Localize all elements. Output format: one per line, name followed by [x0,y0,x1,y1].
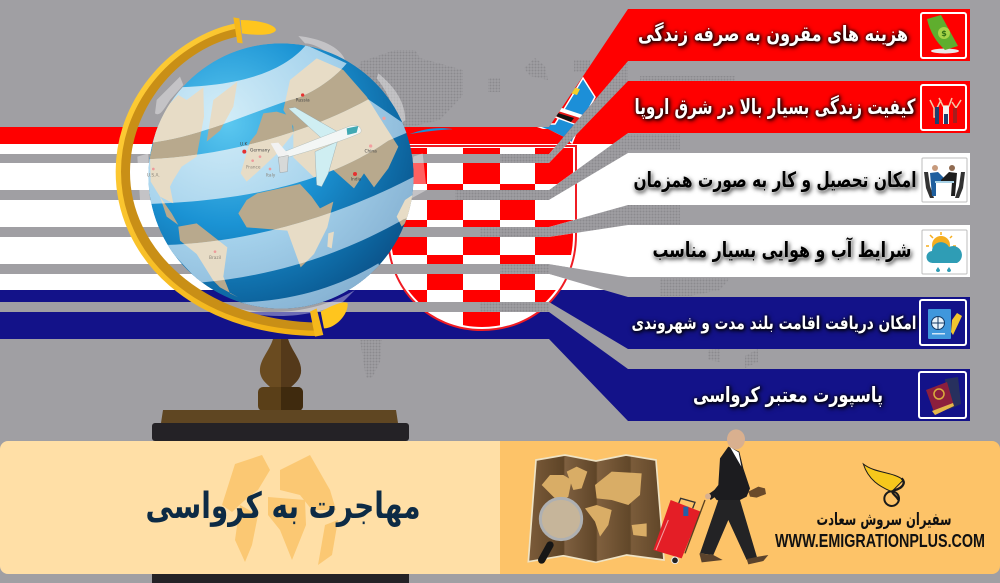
city labels: Germany [250,148,270,154]
red suitcase [653,498,705,564]
airplane [271,107,361,187]
right ribbon labels [632,13,967,418]
checkerboard [391,148,573,330]
dark continents [150,58,415,297]
stand collar shade [281,387,303,411]
stand base below panel [152,574,409,583]
city labels: Italy [266,173,276,179]
label 6 text: پاسپورت معتبر کرواسی [693,383,883,407]
label 4 text: شرایط آب و هوایی بسیار مناسب [652,237,912,262]
label 5 text: امکان دریافت اقامت بلند مدت و شهروندی [632,313,916,334]
city labels [147,93,386,261]
light continents [150,58,415,297]
city labels: Brazil [209,255,221,261]
icon box 6: passports [919,372,966,418]
banner right [500,441,1000,574]
stand neck [260,339,301,387]
title: مهاجرت به کرواسی [146,486,420,527]
icon box 1: money: $ [941,29,947,38]
city labels: France [246,164,261,170]
dark sphere layer [148,43,415,309]
city labels: China [364,148,377,154]
stand collar [258,387,303,411]
folded map [528,455,664,562]
globe stand [152,339,409,441]
city labels: U.K. [240,142,249,148]
logo mark [863,464,904,506]
icon box 5: passport and ticket [920,300,966,345]
coat of arms shield [388,146,576,330]
city labels: India [351,177,362,183]
walking man [699,429,768,564]
globe [118,17,427,337]
light sphere bands [148,43,415,309]
city labels: Russia [296,98,310,104]
banner left [0,441,500,574]
magnifier [540,498,582,560]
icon box 1: money [921,13,966,58]
halo arcs [137,36,427,316]
bottom banner [0,429,1000,574]
stand plinth top [161,410,398,423]
icon box 3: meeting [922,158,967,202]
icon box 2: cheering people [921,85,966,130]
flag stripes [0,0,1000,430]
dotted world map [352,50,758,378]
stand plinth base [152,423,409,441]
coat of arms crown [405,78,595,144]
title watermark globe [222,455,338,565]
icon box 4: weather [922,230,967,274]
arm [118,17,348,337]
label 1 text: هزینه های مقرون به صرفه زندگی [638,21,908,46]
stand neck shade [281,339,301,387]
city labels: U.S.A. [147,173,160,179]
folded Croatian flag ribbons [0,0,1000,430]
map, suitcase, man [528,429,768,564]
